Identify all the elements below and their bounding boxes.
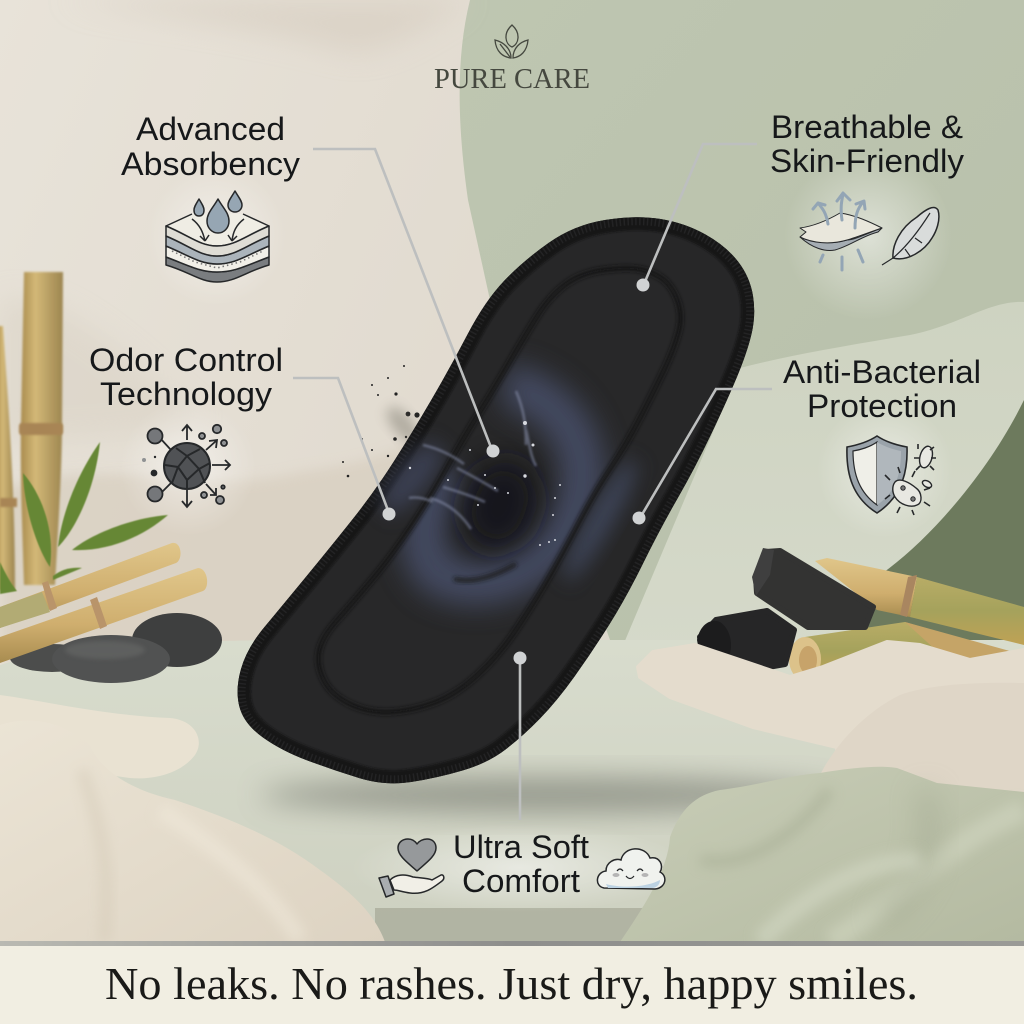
channel — [318, 268, 680, 712]
icon: heart in hand — [379, 839, 444, 897]
brand logo: PURE CARE — [434, 25, 590, 95]
brand logo: PURE CARE: PURE CARE — [434, 64, 590, 95]
callout: anti-bacterial protection: Protection — [807, 388, 957, 424]
stones — [10, 613, 222, 683]
icon: water drops over absorbent layers — [166, 191, 269, 282]
callout: ultra soft comfort: Comfort — [462, 863, 580, 899]
callout: anti-bacterial protection: Anti-Bacterial — [783, 354, 981, 390]
icon: smiling cloud — [597, 849, 665, 889]
callout: advanced absorbency — [121, 111, 300, 282]
leader line: anti-bacterial — [632, 389, 772, 524]
callout: ultra soft comfort: Ultra Soft — [453, 829, 589, 865]
callout: odor control: Odor Control — [89, 342, 283, 378]
leader line: advanced absorbency — [313, 149, 500, 458]
rim glow — [371, 434, 645, 587]
callout: breathable and skin-friendly: Breathable & — [771, 109, 963, 145]
callout: odor control — [89, 342, 283, 507]
icon: leaves — [495, 25, 528, 58]
icon: activated charcoal molecule — [142, 425, 230, 507]
leader line: ultra soft — [514, 652, 526, 820]
stain glow inside channel — [423, 385, 583, 583]
callout: breathable and skin-friendly — [770, 109, 964, 270]
charcoal and bamboo cluster, right — [697, 548, 1024, 681]
bamboo leaves — [0, 442, 168, 594]
moisture droplets — [409, 421, 561, 546]
product: black charcoal pad — [238, 217, 754, 783]
charcoal pieces — [697, 548, 873, 672]
callout: breathable and skin-friendly: Skin-Friendly — [770, 143, 964, 179]
tagline banner: No leaks. No rashes. Just dry, happy smiles. — [105, 958, 918, 1009]
odor particles floating off pad — [342, 365, 420, 477]
bamboo stems, right — [789, 558, 1024, 681]
callout: ultra soft comfort — [379, 829, 665, 899]
horizontal bamboo stems — [0, 543, 207, 663]
icon: shield and bacteria — [847, 436, 936, 515]
cloth folds, left — [0, 695, 385, 942]
vertical bamboo stalks — [0, 272, 63, 590]
leader line: odor control — [293, 378, 396, 520]
callout: odor control: Technology — [100, 376, 272, 412]
cloth folds, right — [620, 642, 1024, 942]
stitched edge — [238, 217, 754, 783]
callout: anti-bacterial protection — [783, 354, 981, 515]
callout: advanced absorbency: Absorbency — [121, 146, 300, 182]
wicking swirl streaks — [409, 391, 536, 529]
pad body — [238, 217, 754, 783]
callout: advanced absorbency: Advanced — [136, 111, 285, 147]
bamboo and stones cluster, left — [0, 272, 222, 683]
icon: feather — [882, 208, 939, 265]
icon: breathable fabric with airflow — [800, 193, 882, 270]
tagline banner — [0, 941, 1024, 1024]
leader line: breathable — [636, 144, 757, 292]
